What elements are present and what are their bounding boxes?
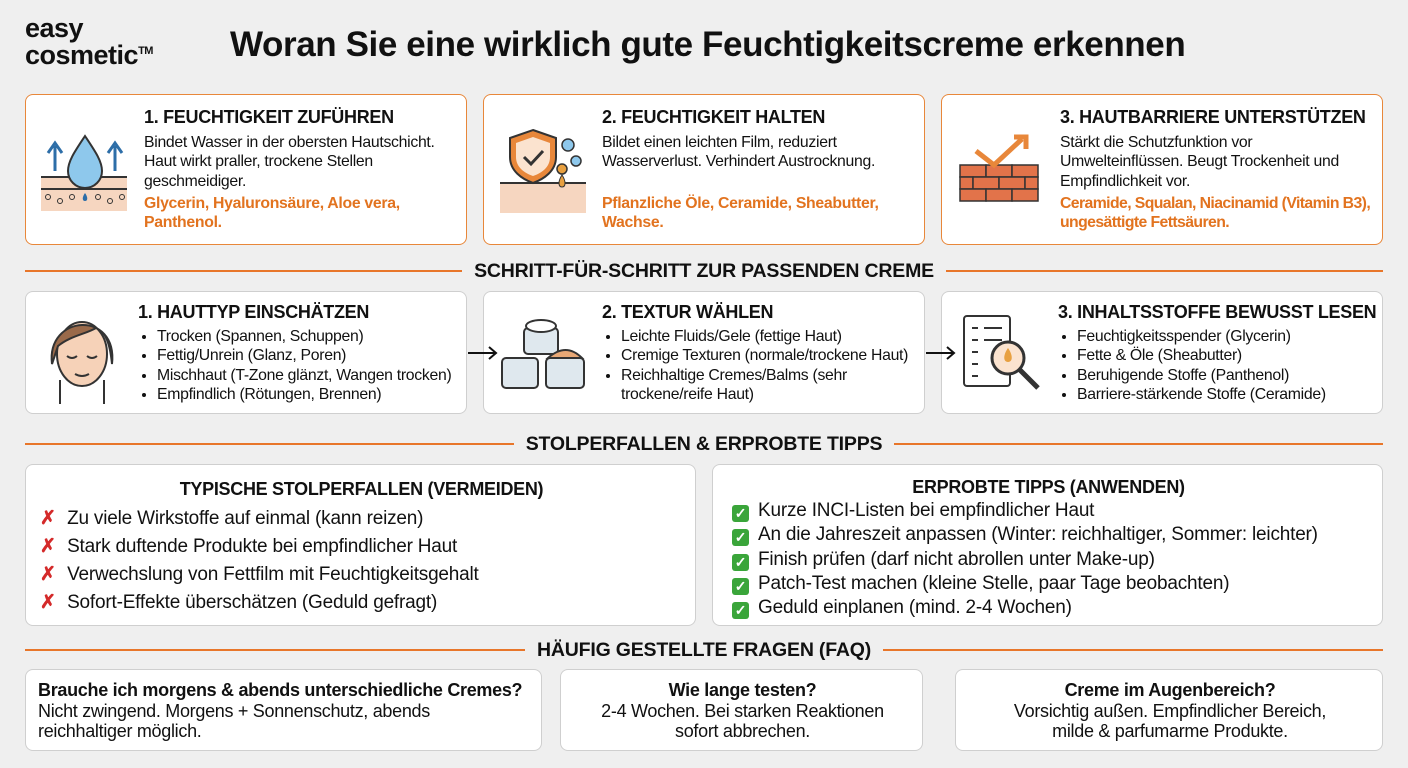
icon: water drop bbox=[41, 134, 127, 211]
panel: hautbarriere: 3. HAUTBARRIERE UNTERSTÜTZEN bbox=[1060, 107, 1366, 127]
panel: stolperfallen: TYPISCHE STOLPERFALLEN (VERMEIDEN) bbox=[180, 479, 543, 499]
panel: feuchtigkeit halten: Wachse. bbox=[602, 214, 663, 231]
panel: hautbarriere: ungesättigte Fettsäuren. bbox=[1060, 214, 1229, 231]
heading: schritt für schritt: SCHRITT-FÜR-SCHRITT ZUR PASSENDEN CREME bbox=[474, 260, 934, 282]
panel: hauttyp bbox=[25, 291, 467, 414]
logo bbox=[25, 13, 153, 70]
panel: feuchtigkeit halten: Bildet einen leichten Film, reduziert bbox=[602, 134, 837, 151]
text bbox=[144, 107, 435, 231]
icon: shield bbox=[500, 129, 586, 213]
heading: faq: HÄUFIG GESTELLTE FRAGEN (FAQ) bbox=[537, 638, 871, 660]
icon: jars bbox=[501, 319, 585, 389]
title: Woran Sie eine wirklich gute Feuchtigkeitscreme erkennen bbox=[230, 25, 1185, 64]
panel: stolperfallen: Stark duftende Produkte bei empfindlicher Haut bbox=[67, 536, 457, 557]
panel: hautbarriere: Empfindlichkeit vor. bbox=[1060, 173, 1190, 190]
icon: list magnifier bbox=[963, 315, 1040, 390]
panel: stolperfallen: ✗ bbox=[40, 508, 56, 529]
panel: stolperfallen: Verwechslung von Fettfilm mit Feuchtigkeitsgehalt bbox=[67, 564, 479, 585]
panel: tipps: ✓ bbox=[735, 505, 746, 521]
faq 1: Brauche ich morgens & abends unterschiedliche Cremes? bbox=[38, 680, 522, 700]
panel: textur: Reichhaltige Cremes/Balms (sehr bbox=[621, 367, 847, 384]
icon: brick wall bbox=[959, 134, 1039, 202]
panel: hautbarriere bbox=[941, 94, 1383, 245]
faq 2: sofort abbrechen. bbox=[675, 721, 810, 741]
panel: textur bbox=[483, 291, 925, 414]
panel: tipps: Finish prüfen (darf nicht abrollen unter Make-up) bbox=[758, 549, 1155, 570]
icon: face bbox=[50, 321, 114, 404]
text: Panthenol. bbox=[144, 214, 222, 231]
text: 1. FEUCHTIGKEIT ZUFÜHREN bbox=[144, 107, 394, 127]
faq 3: milde & parfumarme Produkte. bbox=[1052, 721, 1288, 741]
panel: feuchtigkeit halten bbox=[483, 94, 925, 245]
panel: tipps: ✓ bbox=[735, 578, 746, 594]
faq 3 bbox=[955, 669, 1383, 751]
panel: inhaltsstoffe: Barriere-stärkende Stoffe (Ceramide) bbox=[1077, 386, 1326, 403]
text: Haut wirkt praller, trockene Stellen bbox=[144, 153, 373, 170]
faq 3: Creme im Augenbereich? bbox=[1065, 680, 1275, 700]
panel: feuchtigkeit zuführen bbox=[25, 94, 467, 245]
panel: stolperfallen: Zu viele Wirkstoffe auf einmal (kann reizen) bbox=[67, 508, 423, 529]
panel: stolperfallen: ✗ bbox=[40, 564, 56, 585]
panel: tipps: ✓ bbox=[735, 554, 746, 570]
faq 2 bbox=[560, 669, 923, 751]
panel: hauttyp: Trocken (Spannen, Schuppen) bbox=[157, 328, 363, 345]
panel: hautbarriere: Ceramide, Squalan, Niacinamid (Vitamin B3), bbox=[1060, 195, 1370, 212]
panel: inhaltsstoffe: Beruhigende Stoffe (Panthenol) bbox=[1077, 367, 1289, 384]
panel: stolperfallen bbox=[25, 464, 696, 626]
panel: inhaltsstoffe: Feuchtigkeitsspender (Glycerin) bbox=[1077, 328, 1291, 345]
panel: tipps bbox=[712, 464, 1383, 626]
panel: tipps: Patch-Test machen (kleine Stelle, paar Tage beobachten) bbox=[758, 573, 1229, 594]
arrow 1 bbox=[468, 346, 498, 360]
panel: tipps: ✓ bbox=[735, 529, 746, 545]
text: geschmeidiger. bbox=[144, 173, 246, 190]
heading: stolperfallen: STOLPERFALLEN & ERPROBTE TIPPS bbox=[526, 432, 882, 454]
panel: hautbarriere: Stärkt die Schutzfunktion vor bbox=[1060, 134, 1252, 151]
panel: textur: trockene/reife Haut) bbox=[621, 386, 754, 403]
panel: textur: 2. TEXTUR WÄHLEN bbox=[602, 302, 773, 322]
panel: stolperfallen: ✗ bbox=[40, 592, 56, 613]
panel: tipps: Kurze INCI-Listen bei empfindlicher Haut bbox=[758, 500, 1094, 521]
panel: tipps: An die Jahreszeit anpassen (Winter: reichhaltiger, Sommer: leichter) bbox=[758, 524, 1318, 545]
panel: hauttyp: Empfindlich (Rötungen, Brennen) bbox=[157, 386, 381, 403]
panel: feuchtigkeit halten: Pflanzliche Öle, Ceramide, Sheabutter, bbox=[602, 195, 879, 212]
faq 2: 2-4 Wochen. Bei starken Reaktionen bbox=[601, 700, 884, 720]
panel: hauttyp: 1. HAUTTYP EINSCHÄTZEN bbox=[138, 302, 369, 322]
panel: hautbarriere: Umwelteinflüssen. Beugt Trockenheit und bbox=[1060, 153, 1339, 170]
panel: tipps: ERPROBTE TIPPS (ANWENDEN) bbox=[912, 477, 1185, 497]
panel: hauttyp: Mischhaut (T-Zone glänzt, Wangen trocken) bbox=[157, 367, 451, 384]
panel: tipps: Geduld einplanen (mind. 2-4 Wochen) bbox=[758, 597, 1072, 618]
panel: inhaltsstoffe bbox=[941, 291, 1383, 414]
panel: textur: Cremige Texturen (normale/trockene Haut) bbox=[621, 347, 908, 364]
text: Glycerin, Hyaluronsäure, Aloe vera, bbox=[144, 195, 400, 212]
text: Bindet Wasser in der obersten Hautschicht. bbox=[144, 134, 435, 151]
panel: inhaltsstoffe: Fette & Öle (Sheabutter) bbox=[1077, 347, 1242, 364]
arrow 2 bbox=[926, 346, 956, 360]
faq 2: Wie lange testen? bbox=[669, 680, 816, 700]
panel: feuchtigkeit halten: 2. FEUCHTIGKEIT HALTEN bbox=[602, 107, 825, 127]
faq 3: Vorsichtig außen. Empfindlicher Bereich, bbox=[1014, 700, 1326, 720]
panel: inhaltsstoffe: 3. INHALTSSTOFFE BEWUSST LESEN bbox=[1058, 302, 1376, 322]
panel: stolperfallen: ✗ bbox=[40, 536, 56, 557]
panel: tipps: ✓ bbox=[735, 602, 746, 618]
faq 1: Nicht zwingend. Morgens + Sonnenschutz, abends bbox=[38, 700, 430, 720]
logo: cosmeticTM bbox=[25, 40, 153, 70]
panel: feuchtigkeit halten: Wasserverlust. Verhindert Austrocknung. bbox=[602, 153, 875, 170]
panel: stolperfallen: Sofort-Effekte überschätzen (Geduld gefragt) bbox=[67, 592, 437, 613]
panel: hauttyp: Fettig/Unrein (Glanz, Poren) bbox=[157, 347, 346, 364]
faq 1: reichhaltiger möglich. bbox=[38, 721, 201, 741]
faq 1 bbox=[25, 669, 542, 751]
panel: textur: Leichte Fluids/Gele (fettige Haut) bbox=[621, 328, 842, 345]
logo: easy bbox=[25, 13, 83, 43]
